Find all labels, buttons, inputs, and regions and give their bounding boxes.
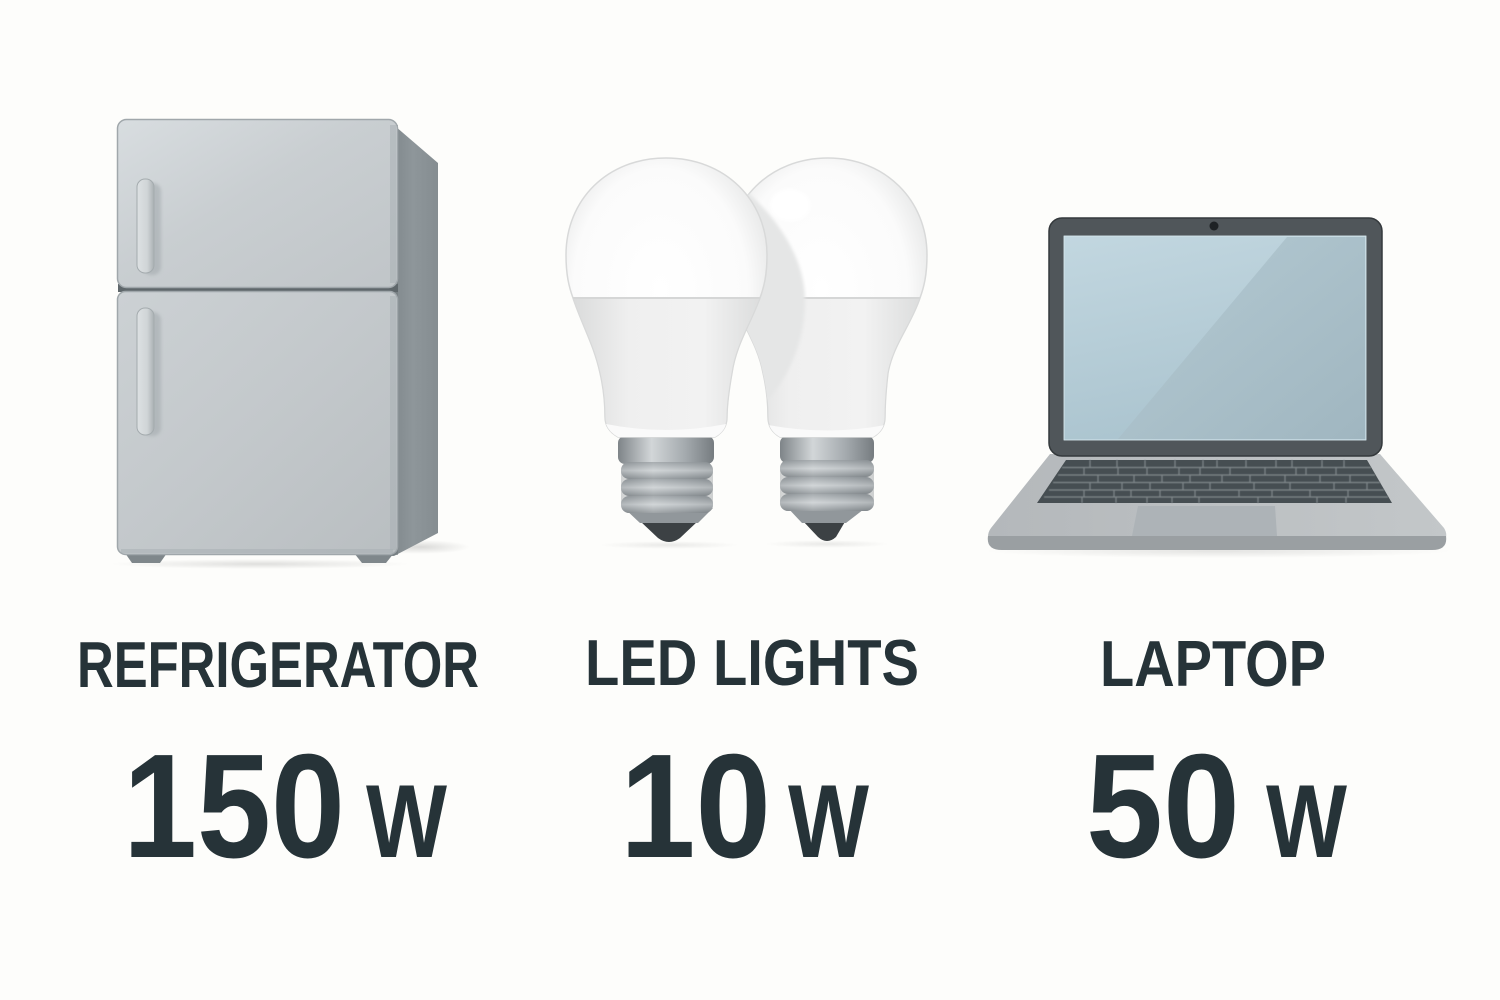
laptop lid — [1049, 218, 1382, 456]
value: 50 W: W — [1266, 764, 1348, 880]
icon: refrigerator — [110, 120, 470, 569]
value: 10 W: W — [788, 764, 870, 880]
icon: laptop — [983, 218, 1453, 558]
value: 10 W — [620, 724, 870, 889]
value: 150 W: 150 — [123, 724, 345, 889]
value: 150 W: W — [366, 764, 448, 880]
value: 50 W — [1086, 724, 1348, 889]
keyboard — [1037, 460, 1392, 503]
label: laptop: LAPTOP — [1100, 627, 1326, 700]
trackpad — [1132, 506, 1277, 536]
icon: LED bulb front — [566, 158, 767, 549]
value: 50 W: 50 — [1086, 724, 1240, 889]
label: refrigerator: REFRIGERATOR — [77, 628, 479, 701]
icon: LED bulb back — [746, 157, 928, 546]
label: LED lights: LED LIGHTS — [585, 626, 919, 699]
value: 10 W: 10 — [620, 724, 771, 889]
